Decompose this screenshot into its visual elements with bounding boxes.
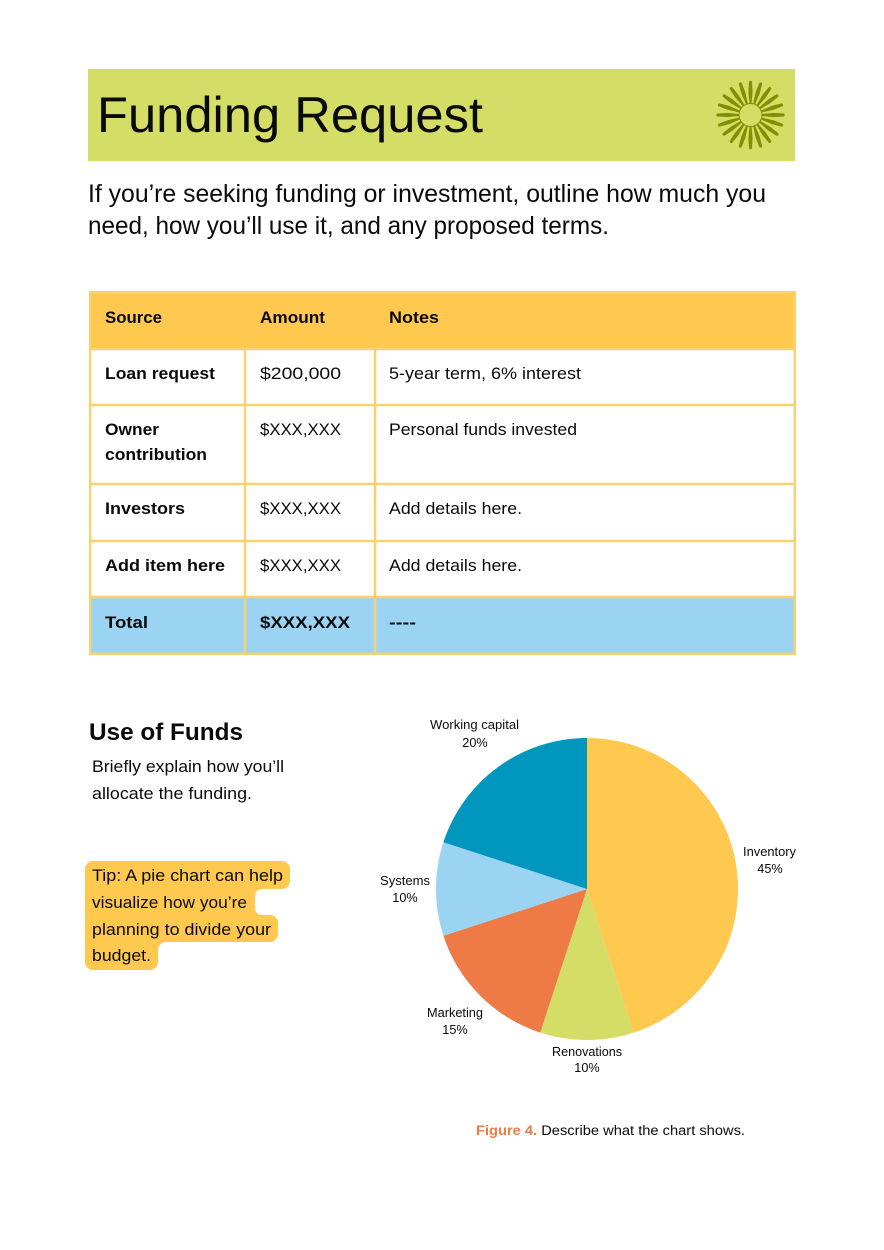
row: add item: Add details here. bbox=[389, 556, 522, 575]
use of funds description bbox=[92, 757, 284, 803]
use of funds description: allocate the funding. bbox=[92, 784, 252, 803]
label: systems: 10% bbox=[392, 891, 418, 905]
label: working capital bbox=[430, 718, 519, 750]
label: systems: Systems bbox=[380, 874, 430, 888]
row: investors: Add details here. bbox=[389, 499, 522, 518]
table header row: Notes bbox=[389, 308, 439, 327]
row: investors bbox=[105, 499, 522, 518]
heading: use of funds: Use of Funds bbox=[89, 719, 243, 746]
row: owner contribution: Owner bbox=[105, 420, 159, 439]
row: add item bbox=[105, 556, 522, 575]
row: loan request: $200,000 bbox=[260, 364, 341, 383]
use of funds description: Briefly explain how you’ll bbox=[92, 757, 284, 776]
intro text bbox=[88, 180, 766, 240]
row: total: $XXX,XXX bbox=[260, 613, 351, 632]
figure caption: Figure 4. Describe what the chart shows. bbox=[476, 1123, 745, 1138]
table header row: Source bbox=[105, 308, 162, 327]
row: add item: $XXX,XXX bbox=[260, 556, 341, 575]
funding table bbox=[90, 292, 795, 654]
label: renovations: Renovations bbox=[552, 1045, 622, 1059]
slice: marketing 15% bbox=[443, 889, 587, 1033]
label: inventory: 45% bbox=[757, 862, 783, 876]
label: systems bbox=[380, 874, 430, 905]
callout: tip: budget. bbox=[92, 946, 151, 965]
title banner bbox=[88, 69, 795, 161]
row: total: ---- bbox=[389, 613, 416, 632]
callout: tip bbox=[85, 861, 290, 970]
row: loan request: Loan request bbox=[105, 364, 215, 383]
row: total: Total bbox=[105, 613, 148, 632]
slice: working capital 20% bbox=[443, 738, 587, 889]
table grid bbox=[90, 292, 795, 654]
table header row bbox=[90, 292, 795, 349]
slice: inventory 45% bbox=[587, 738, 738, 1033]
pie chart bbox=[380, 718, 797, 1075]
table total row background bbox=[90, 597, 795, 654]
label: marketing bbox=[427, 1006, 483, 1037]
row: owner contribution: Personal funds invested bbox=[389, 420, 577, 439]
row: total bbox=[105, 613, 416, 632]
label: renovations bbox=[552, 1045, 622, 1075]
callout: tip: planning to divide your bbox=[92, 920, 271, 939]
label: working capital: Working capital bbox=[430, 718, 519, 732]
label: marketing: Marketing bbox=[427, 1006, 483, 1020]
row: owner contribution: $XXX,XXX bbox=[260, 420, 341, 439]
row: owner contribution bbox=[105, 420, 577, 464]
label: working capital: 20% bbox=[462, 736, 488, 750]
slice: renovations 10% bbox=[540, 889, 634, 1040]
label: inventory: Inventory bbox=[743, 845, 797, 859]
intro text: need, how you’ll use it, and any proposed terms. bbox=[88, 212, 609, 240]
callout: tip: visualize how you’re bbox=[92, 893, 247, 912]
title: Funding Request bbox=[97, 87, 483, 143]
row: investors: Investors bbox=[105, 499, 185, 518]
icon: sunburst bbox=[716, 81, 785, 149]
row: owner contribution: contribution bbox=[105, 445, 207, 464]
row: loan request: 5-year term, 6% interest bbox=[389, 364, 581, 383]
slice: systems 10% bbox=[436, 842, 587, 936]
intro text: If you’re seeking funding or investment, outline how much you bbox=[88, 180, 766, 208]
row: add item: Add item here bbox=[105, 556, 225, 575]
row: investors: $XXX,XXX bbox=[260, 499, 341, 518]
callout: tip: Tip: A pie chart can help bbox=[92, 866, 283, 885]
label: inventory bbox=[743, 845, 797, 876]
label: renovations: 10% bbox=[574, 1061, 600, 1075]
label: marketing: 15% bbox=[442, 1023, 468, 1037]
table header row: Amount bbox=[260, 308, 325, 327]
row: loan request bbox=[105, 364, 581, 383]
